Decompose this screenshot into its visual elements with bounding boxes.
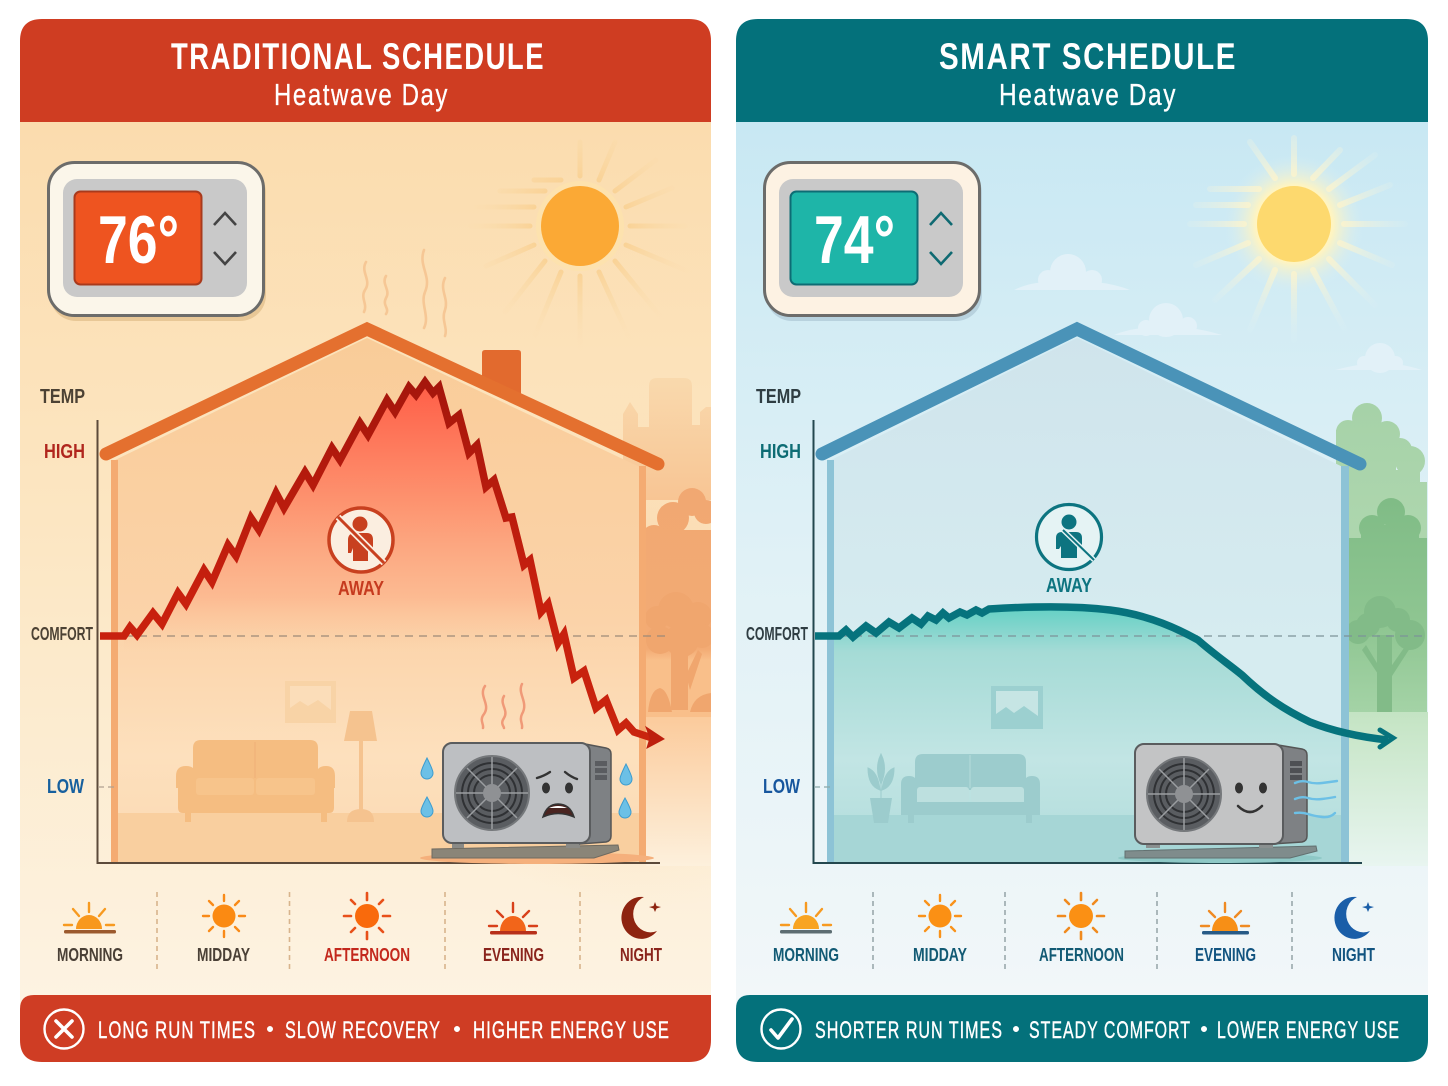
house walls bbox=[827, 460, 1349, 862]
header: traditional: TRADITIONAL SCHEDULE bbox=[171, 36, 545, 77]
footer banner: traditional: SLOW RECOVERY bbox=[285, 1017, 441, 1044]
thermostat: traditional bbox=[48, 162, 266, 321]
furniture: sofa bbox=[901, 754, 1040, 823]
thermostat: traditional: 76° bbox=[98, 202, 179, 278]
fan bbox=[1147, 757, 1221, 831]
icon: sun bbox=[470, 142, 690, 350]
afternoon: AFTERNOON bbox=[324, 945, 410, 965]
evening: EVENING bbox=[483, 945, 544, 965]
red area under temperature curve bbox=[124, 382, 558, 650]
house interior bbox=[111, 338, 646, 862]
away indicator bbox=[329, 508, 393, 600]
header: smart bbox=[736, 19, 1428, 122]
time of day row bbox=[773, 892, 1375, 970]
temperature curve: smart bbox=[815, 607, 1393, 747]
midday bbox=[913, 895, 967, 965]
morning bbox=[57, 903, 123, 965]
panel: traditional schedule bbox=[20, 100, 718, 1020]
footer banner: traditional: LONG RUN TIMES bbox=[98, 1017, 256, 1044]
afternoon bbox=[1039, 893, 1124, 965]
footer banner: traditional bbox=[20, 995, 711, 1062]
furniture: floor bbox=[111, 813, 641, 862]
clouds bbox=[1014, 254, 1422, 373]
comfort guide line bbox=[840, 635, 1428, 637]
icon: sun bbox=[1190, 138, 1405, 340]
temperature curve: traditional bbox=[100, 382, 664, 748]
teal area under temperature curve bbox=[830, 607, 1345, 862]
house interior bbox=[827, 338, 1349, 862]
morning bbox=[773, 903, 839, 965]
sweat drops bbox=[421, 758, 632, 818]
low tick bbox=[98, 786, 116, 788]
header: smart: SMART SCHEDULE bbox=[939, 36, 1237, 77]
morning: MORNING bbox=[773, 945, 839, 965]
background: trees and ground bbox=[1336, 403, 1428, 866]
dividers bbox=[157, 892, 580, 970]
axis labels: HIGH bbox=[44, 441, 85, 463]
axis lines bbox=[98, 420, 660, 863]
worried face bbox=[537, 772, 577, 817]
evening: EVENING bbox=[1195, 945, 1256, 965]
axis labels: TEMP bbox=[40, 386, 85, 408]
house roof bbox=[822, 329, 1360, 464]
happy face bbox=[1235, 782, 1267, 812]
thermostat: smart bbox=[764, 162, 982, 321]
time of day row bbox=[57, 892, 662, 970]
footer banner: smart: STEADY COMFORT bbox=[1029, 1017, 1191, 1044]
furniture: floor lamp bbox=[344, 711, 377, 822]
axis labels: COMFORT bbox=[746, 624, 808, 644]
furniture: picture frame bbox=[285, 681, 336, 723]
axis lines bbox=[814, 420, 1362, 863]
icon: roof heat waves bbox=[363, 250, 446, 336]
icon: AC heat waves bbox=[482, 684, 524, 728]
AC unit: struggling bbox=[420, 743, 654, 864]
afternoon bbox=[324, 893, 410, 965]
night: NIGHT bbox=[1332, 945, 1375, 965]
axis labels: HIGH bbox=[760, 441, 801, 463]
night bbox=[1332, 897, 1375, 965]
thermostat: smart: 74° bbox=[814, 202, 895, 278]
midday bbox=[197, 895, 250, 965]
axis labels: LOW bbox=[47, 776, 84, 798]
midday: MIDDAY bbox=[913, 945, 967, 965]
comfort guide line bbox=[125, 635, 670, 637]
axis labels: TEMP bbox=[756, 386, 801, 408]
header: traditional bbox=[20, 19, 711, 122]
header: traditional: Heatwave Day bbox=[274, 77, 449, 112]
furniture: picture frame bbox=[991, 686, 1043, 729]
evening bbox=[483, 903, 544, 965]
away indicator: AWAY bbox=[1046, 575, 1093, 597]
chimney bbox=[482, 350, 521, 402]
icon: x mark bbox=[44, 1010, 84, 1048]
night bbox=[620, 897, 662, 965]
footer banner: smart: SHORTER RUN TIMES bbox=[815, 1017, 1003, 1044]
icon: check mark bbox=[762, 1010, 800, 1048]
morning: MORNING bbox=[57, 945, 123, 965]
evening bbox=[1195, 903, 1256, 965]
furniture: potted plant bbox=[868, 754, 894, 823]
afternoon: AFTERNOON bbox=[1039, 945, 1124, 965]
panel: smart schedule bbox=[736, 100, 1428, 1020]
background: city and tree bbox=[623, 378, 711, 806]
footer banner: smart bbox=[736, 995, 1428, 1062]
footer banner: traditional: HIGHER ENERGY USE bbox=[473, 1017, 670, 1044]
header: smart: Heatwave Day bbox=[999, 77, 1177, 112]
away indicator: AWAY bbox=[338, 578, 385, 600]
house walls bbox=[111, 460, 646, 862]
axis labels: LOW bbox=[763, 776, 800, 798]
furniture: sofa bbox=[176, 740, 335, 822]
dividers bbox=[873, 892, 1292, 970]
away indicator bbox=[1036, 504, 1102, 597]
low tick bbox=[814, 786, 832, 788]
axis labels: COMFORT bbox=[31, 624, 93, 644]
AC unit: happy bbox=[1118, 744, 1337, 863]
fan bbox=[455, 756, 529, 830]
cool air lines bbox=[1295, 781, 1337, 817]
night: NIGHT bbox=[620, 945, 662, 965]
midday: MIDDAY bbox=[197, 945, 250, 965]
axis labels bbox=[746, 386, 808, 798]
house roof bbox=[106, 329, 658, 464]
furniture: floor bbox=[827, 815, 1349, 862]
axis labels bbox=[31, 386, 93, 798]
